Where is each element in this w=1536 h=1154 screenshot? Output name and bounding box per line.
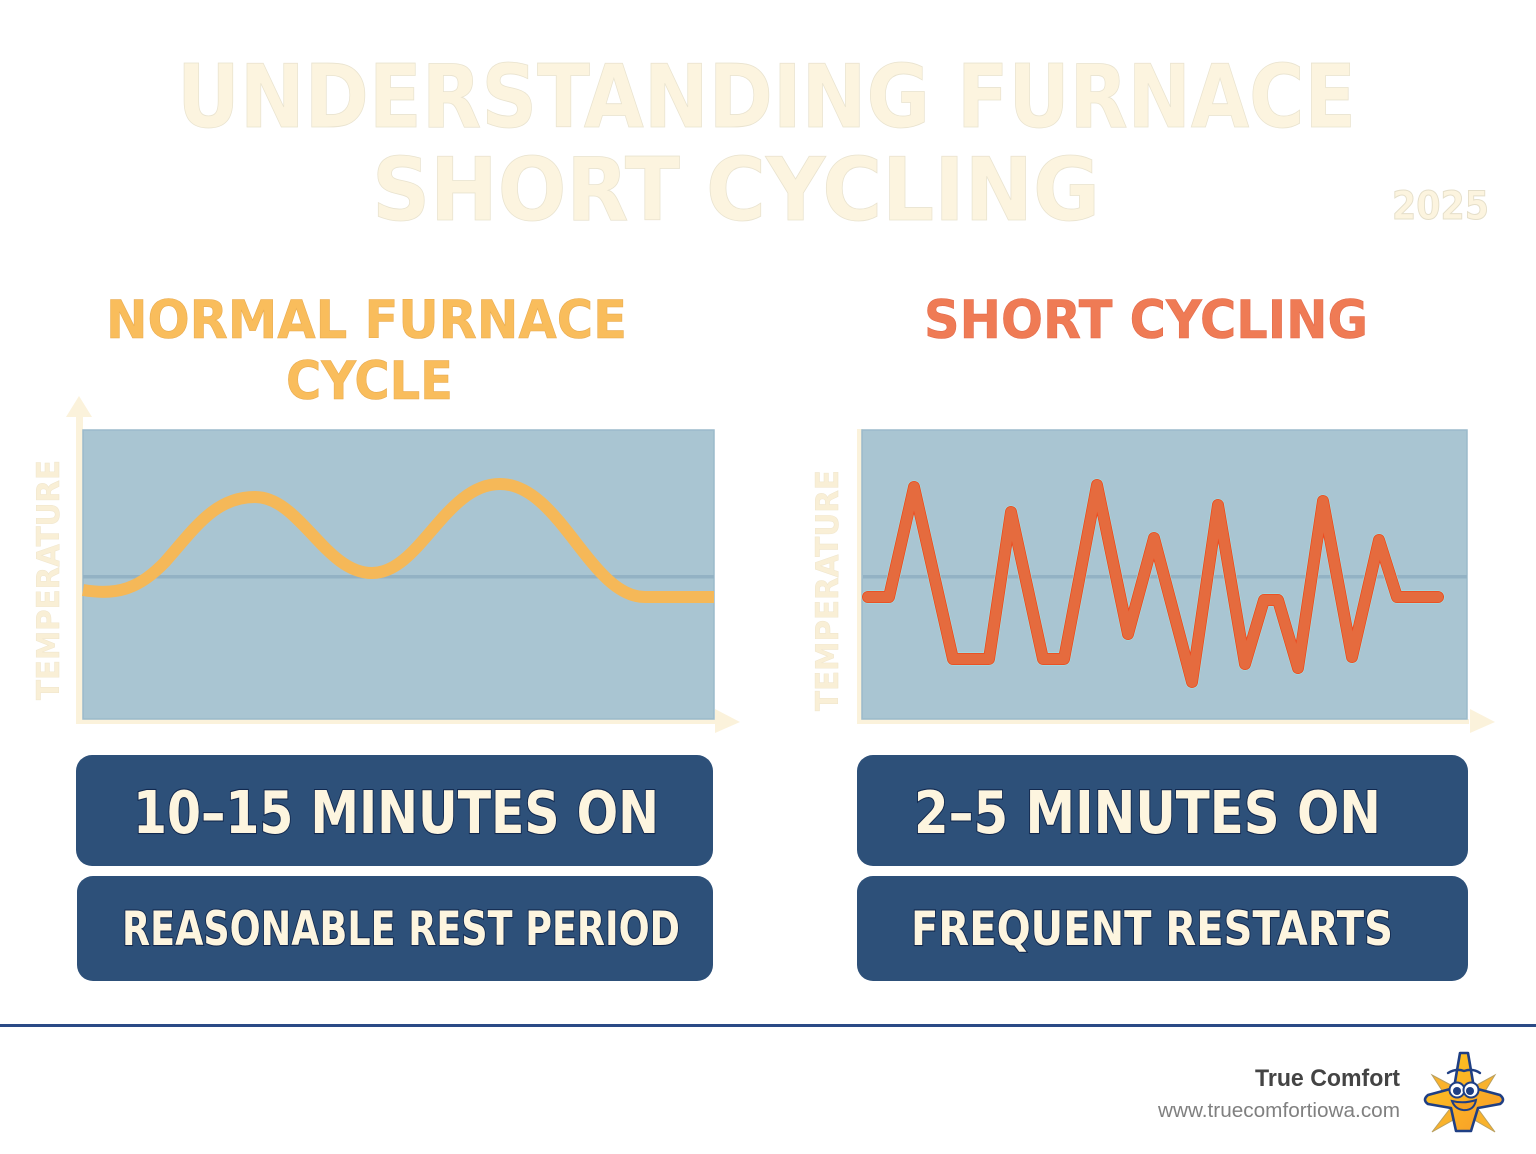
heading: short cycling: SHORT CYCLING xyxy=(924,290,1368,351)
stat pill: 10–15 minutes on xyxy=(76,755,713,866)
footer brand text: True Comfort xyxy=(1255,1065,1400,1092)
heading: normal furnace cycle: CYCLE xyxy=(286,351,453,412)
title xyxy=(177,46,1356,241)
stat pill: frequent restarts xyxy=(857,876,1468,981)
chart axes xyxy=(66,396,740,733)
stat pill: 10–15 minutes on: 10–15 MINUTES ON xyxy=(133,778,659,847)
panel: normal furnace cycle xyxy=(31,290,740,981)
footer brand text: www.truecomfortiowa.com xyxy=(1157,1100,1400,1122)
panel: short cycling xyxy=(810,290,1495,981)
stat pill: frequent restarts: FREQUENT RESTARTS xyxy=(911,902,1393,957)
title: FURNACE xyxy=(957,46,1356,148)
title: SHORT xyxy=(372,139,680,241)
title: UNDERSTANDING xyxy=(177,46,930,148)
y axis label: temperature: TEMPERATURE xyxy=(31,460,67,700)
stat pill: 2–5 minutes on: 2–5 MINUTES ON xyxy=(914,778,1381,847)
heading: normal furnace cycle xyxy=(106,290,627,412)
chart axes xyxy=(857,429,1495,733)
footer brand text xyxy=(1157,1065,1400,1122)
chart plot: short cycling xyxy=(862,430,1467,719)
icon: star mascot logo xyxy=(1425,1053,1503,1132)
title: CYCLING xyxy=(706,139,1100,241)
heading: normal furnace cycle: NORMAL FURNACE xyxy=(106,290,627,351)
stat pill: reasonable rest period xyxy=(77,876,713,981)
line: temperature spikes xyxy=(868,485,1438,682)
footer divider xyxy=(0,1024,1536,1027)
y axis label: temperature: TEMPERATURE xyxy=(810,470,846,711)
line: temperature curve xyxy=(83,484,714,597)
chart plot: normal cycle xyxy=(83,430,714,719)
stat pill: 2–5 minutes on xyxy=(857,755,1468,866)
year label: 2025 xyxy=(1392,184,1489,229)
stat pill: reasonable rest period: REASONABLE REST PERIOD xyxy=(122,902,680,957)
